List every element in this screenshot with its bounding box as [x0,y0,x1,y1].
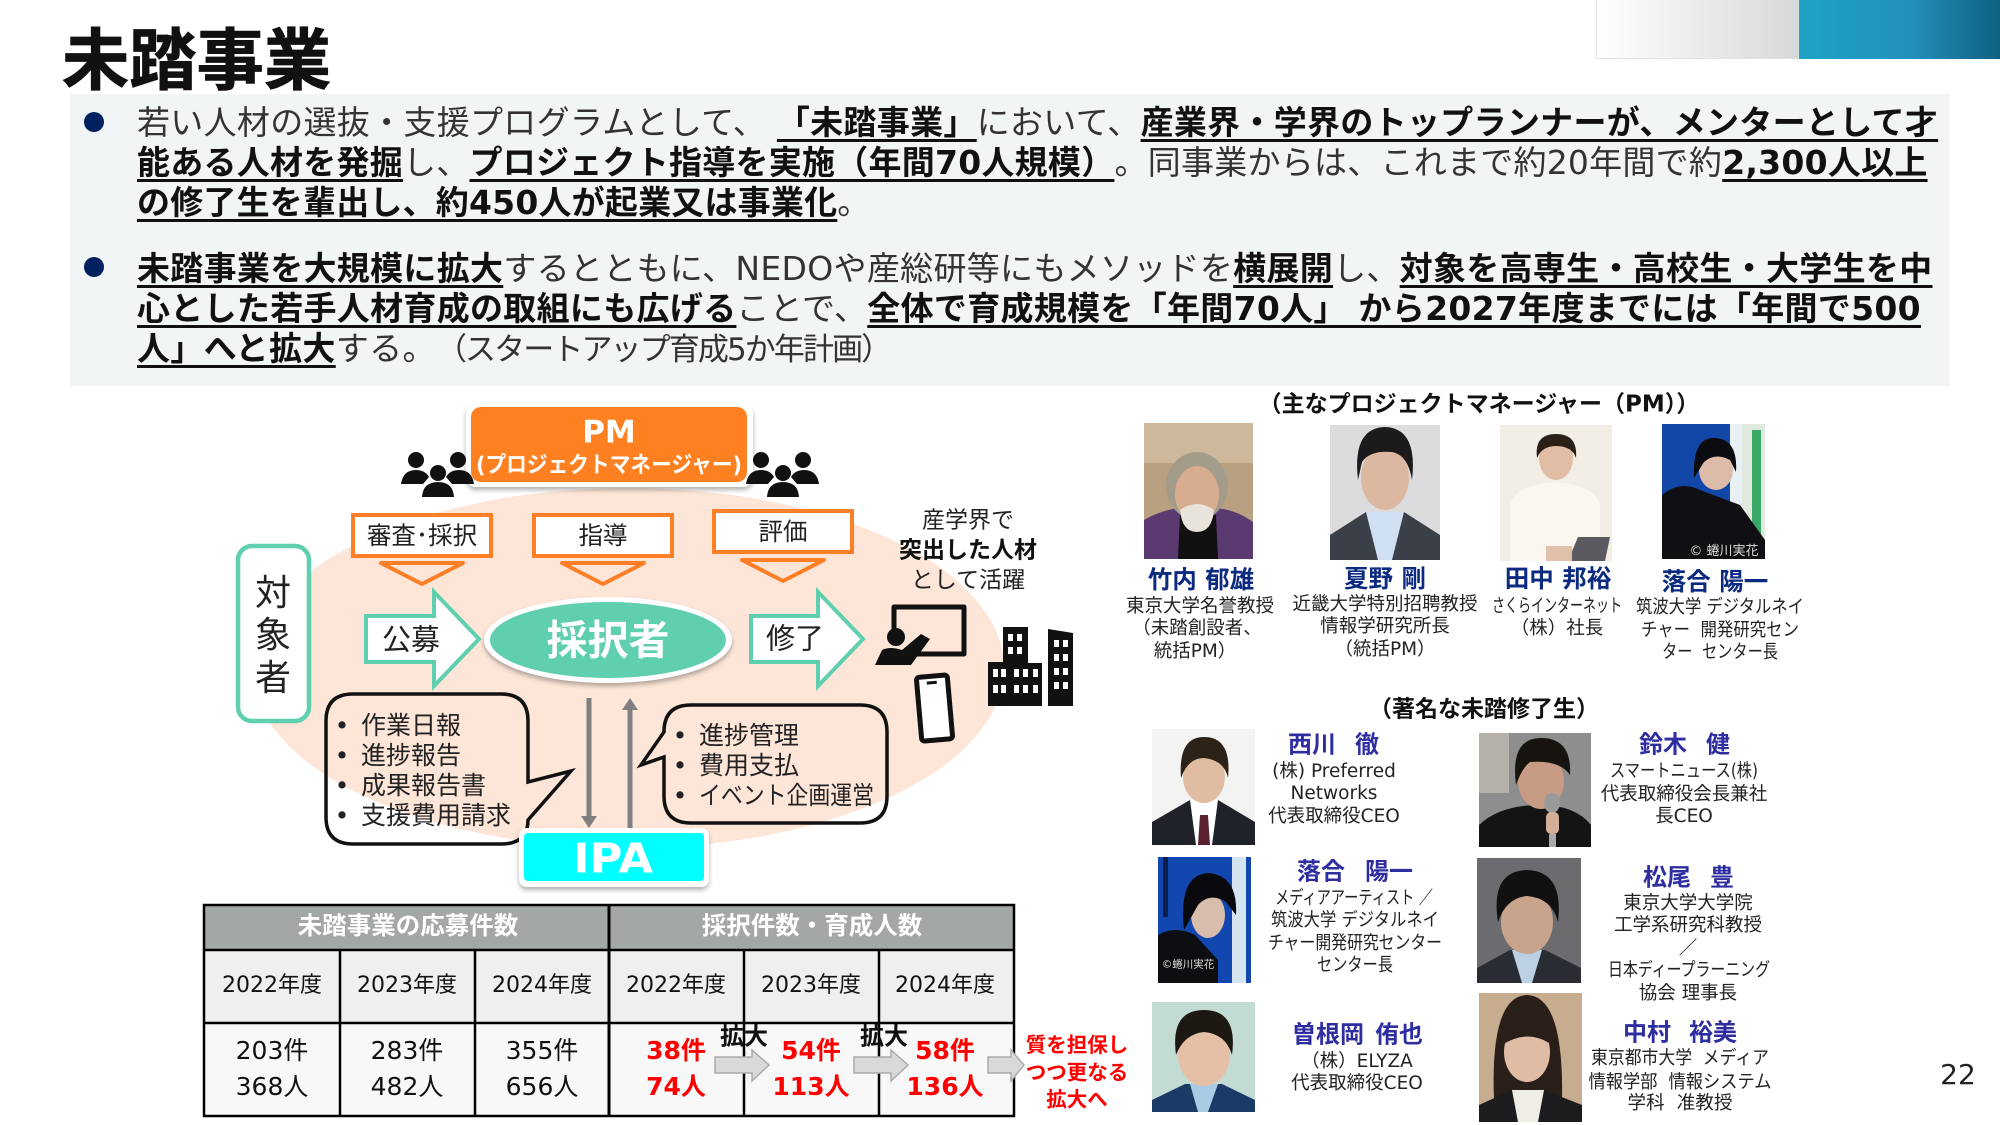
callout: reports to IPA: 作業日報 [361,711,461,740]
person: Ochiai (alumni): 陽一 [1365,858,1413,886]
box: target people: 者 [255,658,291,699]
selection counts: 38件 [646,1036,706,1065]
box: IPA [519,828,709,887]
person: Takeuchi: 東京大学名誉教授 [1126,596,1274,617]
icon: people right [746,452,819,497]
person: Suzuki: 代表取締役会長兼社 [1601,784,1767,805]
person: Soneoka: （株）ELYZA [1301,1051,1413,1072]
person: Nakamura: 学科 准教授 [1628,1093,1732,1114]
table: applications and selections: 58件 [915,1036,975,1065]
person: Nishikawa: 徹 [1355,730,1379,758]
arrow: down to IPA [581,698,597,828]
box: evaluation [714,511,852,581]
box: PM: PM [582,414,636,450]
person: Takeuchi: 竹内 郁雄 [1148,565,1254,594]
callout: reports to IPA: 支援費用請求 [361,801,511,830]
person: Nishikawa: Networks [1291,783,1377,804]
person: Tanaka [1492,425,1622,639]
person: Tanaka: （株）社長 [1511,618,1603,639]
box: review and selection: 審査･採択 [367,521,477,550]
background ellipse [252,488,1004,848]
oval: selected people: 採択者 [546,616,670,664]
text block: first bullet [84,102,1938,222]
callout: reports to IPA: • [335,711,349,740]
table: applications and selections: 採択件数・育成人数 [702,911,923,940]
arrow: completion [751,592,863,686]
person: Suzuki: スマートニュース(株) [1610,761,1758,782]
text block: second bullet: 心とした若手人材育成の取組にも広げることで、全体で育成規模を「年間70人」 から2027年度までには「年間で500 [137,288,1921,328]
person: Natsuno: 近畿大学特別招聘教授 [1292,594,1478,615]
person: Tanaka: さくらインターネット [1492,596,1622,617]
person: Ochiai (PM): ター センター長 [1662,642,1778,663]
table: applications and selections: 368人 [236,1072,308,1101]
person: Matsuo: ／ [1679,938,1697,959]
icon: buildings [988,627,1073,706]
title: 未踏事業 [62,22,331,100]
table: applications and selections: 482人 [371,1072,443,1101]
person: Takeuchi: 統括PM） [1154,641,1236,662]
callout: reports to IPA: • [335,801,349,830]
person: Suzuki: 長CEO [1655,806,1713,827]
callout: further expansion text: つつ更なる [1026,1060,1128,1084]
table: applications and selections: 未踏事業の応募件数 [298,911,519,940]
table: applications and selections: 74人 [646,1072,706,1101]
person: Nakamura: 中村 [1623,1018,1671,1046]
header gradient decoration [1596,0,2000,59]
callout: reports to IPA [326,694,571,844]
person: Soneoka: 侑也 [1375,1020,1423,1048]
table: applications and selections: 2024年度 [492,973,592,998]
person: Ochiai (PM): 筑波大学 デジタルネイ [1636,597,1804,618]
person: Ochiai (PM): 落合 陽一 [1662,567,1768,596]
table: applications and selections: 656人 [506,1072,578,1101]
callout: IPA support: • [673,751,687,780]
arrow: further expansion [988,1050,1024,1081]
person: Ochiai (alumni): 落合 [1297,858,1345,886]
text block: first bullet: 若い人材の選抜・支援プログラムとして、 「未踏事業」において、産業界・学界のトップランナーが、メンターとして才 [137,102,1938,142]
arrow: expansion 1: 拡大 [720,1022,768,1050]
person: Ochiai (alumni): チャー開発研究センター [1268,933,1442,954]
table: applications and selections: 113人 [772,1072,850,1101]
year row [204,950,1014,1023]
text block: first bullet: の修了生を輩出し、約450人が起業又は事業化。 [137,182,870,222]
person: Suzuki: 健 [1706,730,1730,758]
text: outcome: 産学界で [922,508,1014,534]
person: Nishikawa: 代表取締役CEO [1268,806,1400,827]
person: Soneoka [1152,1002,1423,1112]
callout: IPA support: 費用支払 [699,751,799,780]
person: Matsuo: 豊 [1710,864,1734,892]
text: outcome: 突出した人材 [899,538,1037,564]
box: IPA: IPA [573,834,653,882]
table: applications and selections: 2022年度 [626,973,726,998]
oval: selected people [484,597,732,683]
box: guidance: 指導 [578,521,628,550]
table: applications and selections: 283件 [371,1036,443,1065]
person: Ochiai (PM): チャー 開発研究セン [1641,620,1799,641]
table: applications and selections [204,905,1014,1116]
table: applications and selections: 2022年度 [222,973,322,998]
text block: second bullet: 人」へと拡大する。（スタートアップ育成5か年計画） [137,328,890,368]
callout: further expansion text: 拡大へ [1046,1088,1108,1112]
person: Takeuchi [1126,423,1274,662]
box: guidance [534,515,672,584]
text block: first bullet: 能ある人材を発掘し、プロジェクト指導を実施（年間70人規模）。同事業からは、これまで約20年間で約2,300人以上 [137,142,1928,182]
panel: summary text [70,94,1950,386]
person: Matsuo [1477,858,1770,1004]
person: Ochiai (alumni) [1158,857,1442,983]
box: target people [238,546,309,721]
text: outcome: として活躍 [911,568,1025,594]
heading: main PMs: （主なプロジェクトマネージャー（PM）） [1259,392,1699,418]
person: Suzuki [1479,730,1767,847]
arrow: completion: 修了 [766,622,824,656]
icon: people left [401,452,474,497]
person: Matsuo: 日本ディープラーニング [1608,960,1770,981]
person: Ochiai (PM) [1636,424,1804,663]
person: Natsuno: 夏野 剛 [1344,564,1426,593]
icon: presenter and board [875,607,964,665]
arrow: recruitment: 公募 [382,622,440,656]
person: Nakamura: 情報学部 情報システム [1588,1072,1772,1093]
arrow: expansion 1 [715,1022,769,1081]
person: Matsuo: 工学系研究科教授 [1614,915,1762,936]
arrow: expansion 2: 拡大 [860,1022,908,1050]
table: applications and selections: 54件 [781,1036,841,1065]
callout: further expansion text [1026,1033,1128,1112]
person: Nakamura [1479,993,1772,1122]
person: Nishikawa [1152,729,1400,845]
box: target people: 対 [255,573,291,614]
box: evaluation: 評価 [758,517,808,546]
person: Soneoka: 曽根岡 [1292,1020,1364,1048]
person: Natsuno: （統括PM） [1334,639,1436,660]
person: Suzuki: 鈴木 [1639,730,1687,758]
page number: 22 [1940,1058,1976,1091]
callout: reports to IPA: • [335,771,349,800]
arrow: expansion 2 [854,1022,908,1081]
person: Matsuo: 協会 理事長 [1639,983,1737,1004]
person: Natsuno [1292,425,1478,660]
text block: second bullet: 未踏事業を大規模に拡大するとともに、NEDOや産総研等にもメソッドを横展開し、対象を高専生・高校生・大学生を中 [137,248,1932,288]
person: Takeuchi: （未踏創設者、 [1132,618,1262,639]
table: applications and selections: 136人 [906,1072,984,1101]
person: Ochiai (alumni): ©蜷川実花 [1162,958,1215,970]
callout: reports to IPA: 成果報告書 [361,771,486,800]
text: outcome [899,508,1037,594]
arrow: up from IPA [622,698,638,828]
person: Nishikawa: 西川 [1288,730,1336,758]
icon: smartphone [916,675,953,741]
person: Ochiai (alumni): 筑波大学 デジタルネイ [1271,910,1439,931]
text block: second bullet [84,248,1932,368]
box: review and selection [353,515,491,584]
application counts: 203件 [236,1036,308,1065]
person: Soneoka: 代表取締役CEO [1291,1073,1423,1094]
box: target people: 象 [255,615,291,656]
table: applications and selections: 2023年度 [761,973,861,998]
person: Ochiai (alumni): メディアアーティスト ／ [1275,888,1433,909]
callout: IPA support: • [673,721,687,750]
person: Nishikawa: (株) Preferred [1272,761,1396,782]
person: Ochiai (PM): © 蜷川実花 [1689,543,1759,559]
table: applications and selections: 2023年度 [357,973,457,998]
table: applications and selections: 2024年度 [895,973,995,998]
person: Tanaka: 田中 邦裕 [1505,564,1612,593]
callout: further expansion text: 質を担保し [1026,1033,1128,1057]
person: Nakamura: 東京都市大学 メディア [1591,1048,1769,1069]
panel: program diagram [238,403,1073,887]
callout: IPA support: イベント企画運営 [699,781,874,810]
callout: reports to IPA: 進捗報告 [361,741,461,770]
callout: reports to IPA: • [335,741,349,770]
callout: IPA support: • [673,781,687,810]
header row [204,905,1014,950]
person: Matsuo: 東京大学大学院 [1623,893,1753,914]
table: applications and selections: 355件 [506,1036,578,1065]
person: Matsuo: 松尾 [1643,864,1691,892]
heading: notable alumni: （著名な未踏修了生） [1369,696,1599,722]
box: PM [466,403,753,487]
person: Natsuno: 情報学研究所長 [1320,616,1450,637]
arrow: recruitment [366,592,479,686]
person: Ochiai (alumni): センター長 [1317,955,1393,976]
person: Nakamura: 裕美 [1689,1018,1737,1046]
box: PM: (プロジェクトマネージャー) [476,452,742,478]
callout: IPA support [641,705,887,823]
callout: IPA support: 進捗管理 [699,721,799,750]
